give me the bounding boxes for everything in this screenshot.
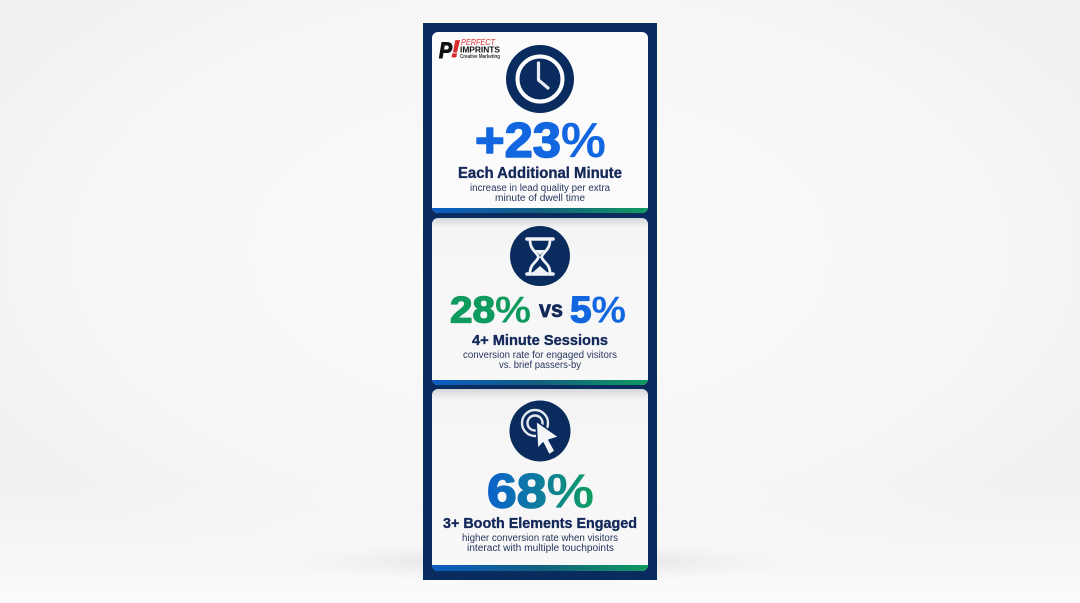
- logo: Perfect Imprints: P: [439, 38, 452, 63]
- stat: 5%: 5%: [570, 290, 626, 330]
- description: higher conversion rate when visitors: [462, 533, 618, 544]
- card background: [432, 218, 648, 385]
- description: [470, 183, 610, 204]
- description: increase in lead quality per extra: [470, 183, 610, 194]
- stat: 68%: 68%: [487, 464, 594, 518]
- panel: 3+ booth elements engaged: [432, 389, 648, 571]
- navy backing panel: [423, 23, 657, 580]
- icon: cursor click: [510, 400, 570, 462]
- description: minute of dwell time: [495, 193, 585, 204]
- logo: Perfect Imprints: Creative Marketing: [460, 54, 500, 60]
- vs label: vs: [539, 296, 563, 322]
- heading: 3+ Booth Elements Engaged: [443, 515, 637, 532]
- heading: 4+ Minute Sessions: [472, 332, 608, 349]
- card background: [432, 389, 648, 571]
- description: [463, 350, 617, 371]
- stat: +23%: +23%: [475, 114, 606, 168]
- card background: [432, 32, 648, 213]
- logo: Perfect Imprints: !: [451, 36, 460, 63]
- icon: hourglass: [510, 226, 570, 286]
- stat: 28%: 28%: [450, 290, 531, 330]
- description: [462, 533, 618, 554]
- gradient bar: [432, 565, 648, 571]
- panel: 4+ minute sessions: [432, 218, 648, 385]
- logo: Perfect Imprints: IMPRINTS: [460, 46, 501, 54]
- logo: Perfect Imprints: [439, 36, 501, 63]
- heading: Each Additional Minute: [458, 165, 622, 182]
- gradient bar: [432, 380, 648, 385]
- description: interact with multiple touchpoints: [467, 543, 614, 554]
- panel: each additional minute: [432, 32, 648, 213]
- description: vs. brief passers-by: [499, 360, 581, 371]
- icon: clock: [506, 45, 574, 113]
- description: conversion rate for engaged visitors: [463, 350, 617, 361]
- gradient bar: [432, 208, 648, 213]
- logo: Perfect Imprints: PERFECT: [461, 38, 496, 47]
- infographic canvas: [389, 23, 690, 580]
